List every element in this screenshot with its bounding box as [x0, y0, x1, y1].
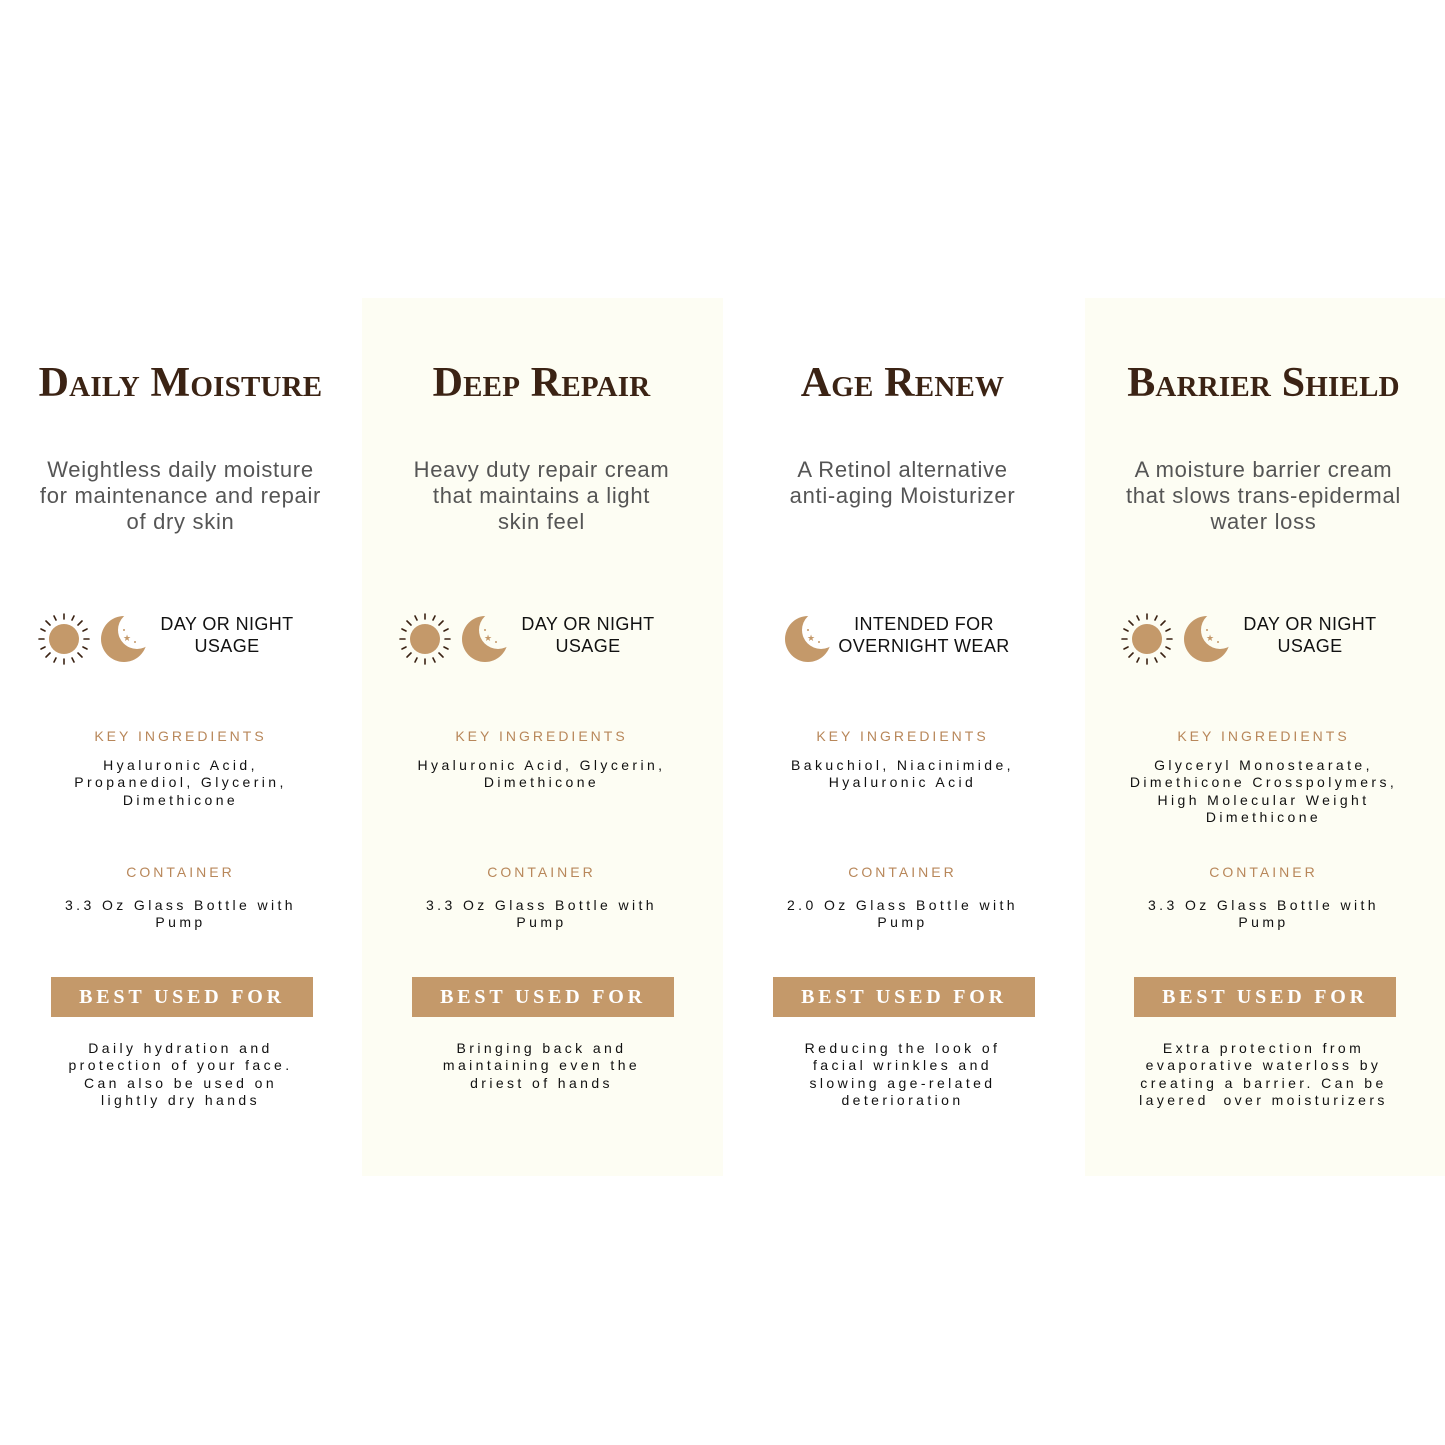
- icon: sun: [1121, 613, 1173, 665]
- container text: Pump: [516, 914, 567, 930]
- panel: deep repair: [399, 360, 674, 1091]
- container label: CONTAINER: [487, 864, 596, 880]
- description: A moisture barrier cream: [1135, 457, 1392, 482]
- container text: Pump: [877, 914, 928, 930]
- usage text: USAGE: [1277, 636, 1343, 656]
- best used text: driest of hands: [470, 1075, 613, 1091]
- best used text: facial wrinkles and: [813, 1057, 992, 1073]
- best used text: maintaining even the: [443, 1057, 640, 1073]
- best used text: creating a barrier. Can be: [1140, 1075, 1387, 1091]
- container text: 3.3 Oz Glass Bottle with: [65, 897, 296, 913]
- usage text: [838, 614, 1010, 656]
- container text: [787, 897, 1018, 930]
- best used text: lightly dry hands: [101, 1092, 260, 1108]
- description: Weightless daily moisture: [47, 457, 314, 482]
- best used for button: BEST USED FOR: [801, 986, 1007, 1008]
- key ingredients label: KEY INGREDIENTS: [1177, 728, 1350, 744]
- ingredients: [418, 757, 665, 790]
- description: Heavy duty repair cream: [414, 457, 669, 482]
- ingredients: High Molecular Weight: [1158, 792, 1369, 808]
- usage text: [521, 614, 655, 656]
- description: A Retinol alternative: [797, 457, 1008, 482]
- description: that slows trans-epidermal: [1126, 483, 1401, 508]
- icon: sun: [399, 613, 451, 665]
- container text: 2.0 Oz Glass Bottle with: [787, 897, 1018, 913]
- best used for button: BEST USED FOR: [440, 986, 646, 1008]
- ingredients: Propanediol, Glycerin,: [74, 774, 287, 790]
- panel: age renew: [773, 360, 1035, 1108]
- icon: moon: [462, 616, 507, 662]
- ingredients: Glyceryl Monostearate,: [1154, 757, 1373, 773]
- container label: CONTAINER: [126, 864, 235, 880]
- usage text: OVERNIGHT WEAR: [838, 636, 1010, 656]
- ingredients: [791, 757, 1014, 790]
- best used for button: [51, 977, 313, 1017]
- best used for button: BEST USED FOR: [1162, 986, 1368, 1008]
- description: [790, 457, 1015, 508]
- description: skin feel: [498, 509, 585, 534]
- icon: moon: [1184, 616, 1229, 662]
- best used for button: [1134, 977, 1396, 1017]
- best used for button: [773, 977, 1035, 1017]
- title: Daily Moisture: [39, 360, 322, 406]
- container label: CONTAINER: [1209, 864, 1318, 880]
- ingredients: Dimethicone Crosspolymers,: [1130, 774, 1397, 790]
- ingredients: Hyaluronic Acid,: [103, 757, 258, 773]
- container text: Pump: [155, 914, 206, 930]
- best used for button: [412, 977, 674, 1017]
- usage text: [1243, 614, 1377, 656]
- best used text: layered over moisturizers: [1139, 1092, 1388, 1108]
- usage text: INTENDED FOR: [854, 614, 994, 634]
- description: for maintenance and repair: [40, 483, 321, 508]
- ingredients: Hyaluronic Acid, Glycerin,: [418, 757, 665, 773]
- description: [414, 457, 669, 534]
- best used text: protection of your face.: [68, 1057, 292, 1073]
- usage text: USAGE: [194, 636, 260, 656]
- key ingredients label: KEY INGREDIENTS: [455, 728, 628, 744]
- panel: daily moisture: [38, 360, 322, 1108]
- best used text: [1139, 1040, 1388, 1108]
- title: Barrier Shield: [1127, 360, 1400, 406]
- description: [40, 457, 321, 534]
- container text: [65, 897, 296, 930]
- description: water loss: [1210, 509, 1317, 534]
- description: that maintains a light: [433, 483, 650, 508]
- usage text: USAGE: [555, 636, 621, 656]
- key ingredients label: KEY INGREDIENTS: [816, 728, 989, 744]
- description: anti-aging Moisturizer: [790, 483, 1015, 508]
- icon: moon: [101, 616, 146, 662]
- ingredients: [1130, 757, 1397, 825]
- usage text: [160, 614, 294, 656]
- best used text: Bringing back and: [457, 1040, 626, 1056]
- container text: [1148, 897, 1379, 930]
- best used text: slowing age-related: [809, 1075, 996, 1091]
- icon: moon: [785, 616, 830, 662]
- best used for button: BEST USED FOR: [79, 986, 285, 1008]
- best used text: Reducing the look of: [805, 1040, 1000, 1056]
- container text: 3.3 Oz Glass Bottle with: [1148, 897, 1379, 913]
- ingredients: Dimethicone: [484, 774, 599, 790]
- description: [1126, 457, 1401, 534]
- title: Age Renew: [801, 360, 1004, 406]
- best used text: [443, 1040, 640, 1091]
- usage row: [399, 613, 655, 665]
- best used text: Daily hydration and: [88, 1040, 273, 1056]
- ingredients: [74, 757, 287, 808]
- best used text: [805, 1040, 1000, 1108]
- usage text: DAY OR NIGHT: [160, 614, 294, 634]
- panel background: barrier shield: [1085, 298, 1445, 1176]
- container text: 3.3 Oz Glass Bottle with: [426, 897, 657, 913]
- best used text: deterioration: [841, 1092, 964, 1108]
- ingredients: Dimethicone: [1206, 809, 1321, 825]
- description: of dry skin: [127, 509, 234, 534]
- icon: sun: [38, 613, 90, 665]
- best used text: evaporative waterloss by: [1146, 1057, 1381, 1073]
- usage row: [38, 613, 294, 665]
- best used text: Extra protection from: [1163, 1040, 1364, 1056]
- container text: [426, 897, 657, 930]
- usage row: [1121, 613, 1377, 665]
- ingredients: Dimethicone: [123, 792, 238, 808]
- panel background: deep repair: [362, 298, 723, 1176]
- key ingredients label: KEY INGREDIENTS: [94, 728, 267, 744]
- best used text: [68, 1040, 292, 1108]
- ingredients: Hyaluronic Acid: [829, 774, 976, 790]
- ingredients: Bakuchiol, Niacinimide,: [791, 757, 1014, 773]
- title: Deep Repair: [433, 360, 650, 406]
- container label: CONTAINER: [848, 864, 957, 880]
- best used text: Can also be used on: [84, 1075, 277, 1091]
- panel: barrier shield: [1121, 360, 1401, 1108]
- usage text: DAY OR NIGHT: [1243, 614, 1377, 634]
- usage row: [785, 614, 1010, 662]
- container text: Pump: [1238, 914, 1289, 930]
- usage text: DAY OR NIGHT: [521, 614, 655, 634]
